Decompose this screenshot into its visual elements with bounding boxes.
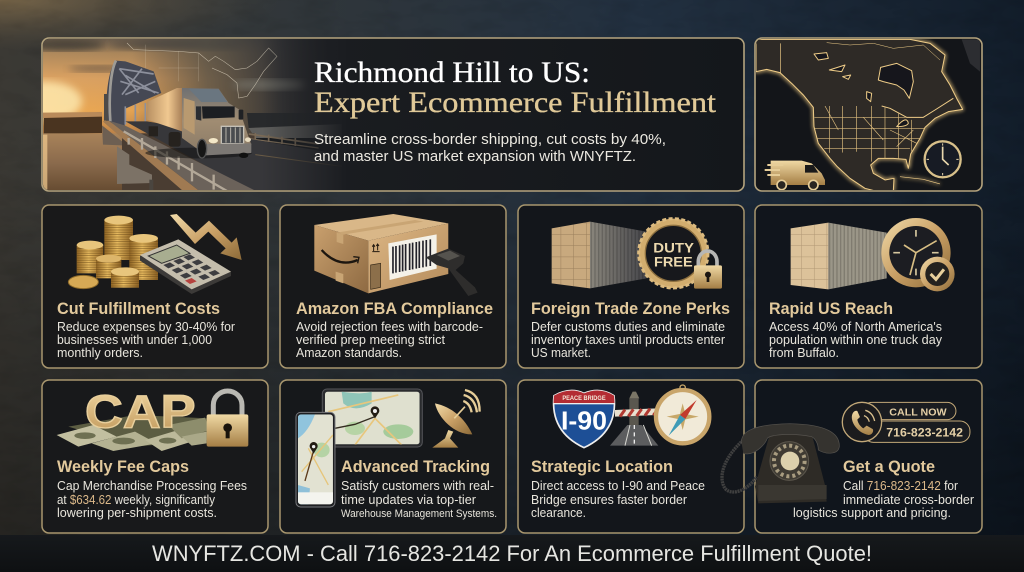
description: logistics support and pricing.	[793, 506, 951, 520]
icon: CAP lettering, cash pile and padlock	[57, 386, 248, 451]
description: Amazon standards.	[296, 346, 402, 360]
US state lines	[813, 106, 927, 163]
icon: coins, calculator and falling arrow	[68, 214, 242, 294]
description: Warehouse Management Systems.	[341, 508, 497, 520]
piers	[102, 125, 122, 145]
far guard rail	[249, 133, 319, 148]
panel: Strategic Location	[518, 380, 744, 533]
icon: vintage rotary telephone	[722, 424, 839, 503]
description: verified prep meeting strict	[296, 333, 446, 347]
heading: Get a Quote	[843, 457, 935, 476]
description: Bridge ensures faster border	[531, 493, 687, 507]
description: Avoid rejection fees with barcode-	[296, 320, 483, 334]
hero title	[314, 56, 717, 119]
description: from Buffalo.	[769, 346, 839, 360]
panel: Get a Quote	[755, 380, 982, 533]
icon: I-90 shield, border barrier and compass: I-90	[561, 405, 607, 435]
icon: shipping box and barcode scanner	[314, 214, 478, 296]
icon: container, duty free seal and padlock: FREE	[654, 254, 693, 270]
description: Cap Merchandise Processing Fees	[57, 479, 247, 493]
icon: container, duty free seal and padlock	[552, 219, 722, 289]
description: at $634.62 weekly, significantly	[57, 493, 216, 507]
heading: Advanced Tracking	[341, 457, 490, 476]
panel: Weekly Fee Caps	[42, 380, 268, 533]
description: population within one truck day	[769, 333, 943, 347]
icon: I-90 shield, border barrier and compass	[550, 385, 709, 448]
description	[57, 479, 247, 520]
panel: North America map	[755, 38, 982, 191]
description: Access 40% of North America's	[769, 320, 942, 334]
bridge arch	[106, 61, 161, 127]
panel: Advanced Tracking	[280, 380, 506, 533]
description	[769, 320, 943, 360]
description: Direct access to I-90 and Peace	[531, 479, 705, 493]
description	[57, 320, 235, 360]
description: clearance.	[531, 506, 586, 520]
road deck	[126, 121, 323, 190]
description: lowering per-shipment costs.	[57, 506, 217, 520]
description: immediate cross-border	[843, 493, 974, 507]
icon: container, duty free seal and padlock: DUTY	[653, 240, 695, 256]
description	[793, 479, 974, 520]
description: US market.	[531, 346, 591, 360]
heading: Foreign Trade Zone Perks	[531, 299, 730, 318]
icon: delivery van	[765, 161, 825, 190]
footer text: WNYFTZ.COM - Call 716-823-2142 For An Ecommerce Fulfillment Quote!	[152, 541, 872, 566]
description: businesses with under 1,000	[57, 333, 212, 347]
description: Call 716-823-2142 for	[843, 479, 958, 493]
description: inventory taxes until products enter	[531, 333, 725, 347]
description: Defer customs duties and eliminate	[531, 320, 725, 334]
hero title: Richmond Hill to US:	[314, 56, 590, 89]
icon: tablet, phone and satellite dish	[296, 389, 480, 507]
icon: clock	[925, 141, 961, 177]
badge: call now: CALL NOW	[889, 407, 947, 418]
description: Reduce expenses by 30-40% for	[57, 320, 235, 334]
panel: Foreign Trade Zone Perks	[518, 205, 744, 368]
panel: Cut Fulfillment Costs	[42, 205, 268, 368]
panel: Amazon FBA Compliance	[280, 205, 506, 368]
badge: call now	[842, 402, 970, 442]
hero illustration: truck crossing bridge at sunset	[43, 39, 338, 190]
heading: Strategic Location	[531, 457, 673, 476]
icon: container, clock and check badge	[791, 218, 955, 291]
panel: Rapid US Reach	[755, 205, 982, 368]
hero title: Expert Ecommerce Fulfillment	[314, 86, 717, 119]
badge: call now: 716-823-2142	[886, 425, 963, 439]
heading: Weekly Fee Caps	[57, 457, 189, 476]
near guard rail	[103, 121, 202, 193]
footer banner	[0, 535, 1024, 572]
description: Satisfy customers with real-	[341, 479, 494, 493]
description	[296, 320, 483, 360]
hero subtitle: and master US market expansion with WNYFTZ.	[314, 148, 636, 165]
description	[341, 479, 497, 520]
heading: Amazon FBA Compliance	[296, 299, 493, 318]
description	[531, 479, 705, 520]
truck	[145, 148, 252, 158]
heading: Rapid US Reach	[769, 299, 893, 318]
icon: I-90 shield, border barrier and compass: PEACE BRIDGE	[562, 395, 606, 402]
hero subtitle: Streamline cross-border shipping, cut costs by 40%,	[314, 131, 666, 148]
hero subtitle	[314, 131, 666, 165]
icon: CAP lettering, cash pile and padlock: CAP	[85, 386, 196, 438]
panel: hero banner	[9, 38, 744, 193]
description: time updates via top-tier	[341, 493, 476, 507]
heading: Cut Fulfillment Costs	[57, 299, 220, 318]
map: North America glowing outline	[756, 39, 963, 191]
description: monthly orders.	[57, 346, 143, 360]
description	[531, 320, 725, 360]
distant map outline	[127, 43, 277, 98]
